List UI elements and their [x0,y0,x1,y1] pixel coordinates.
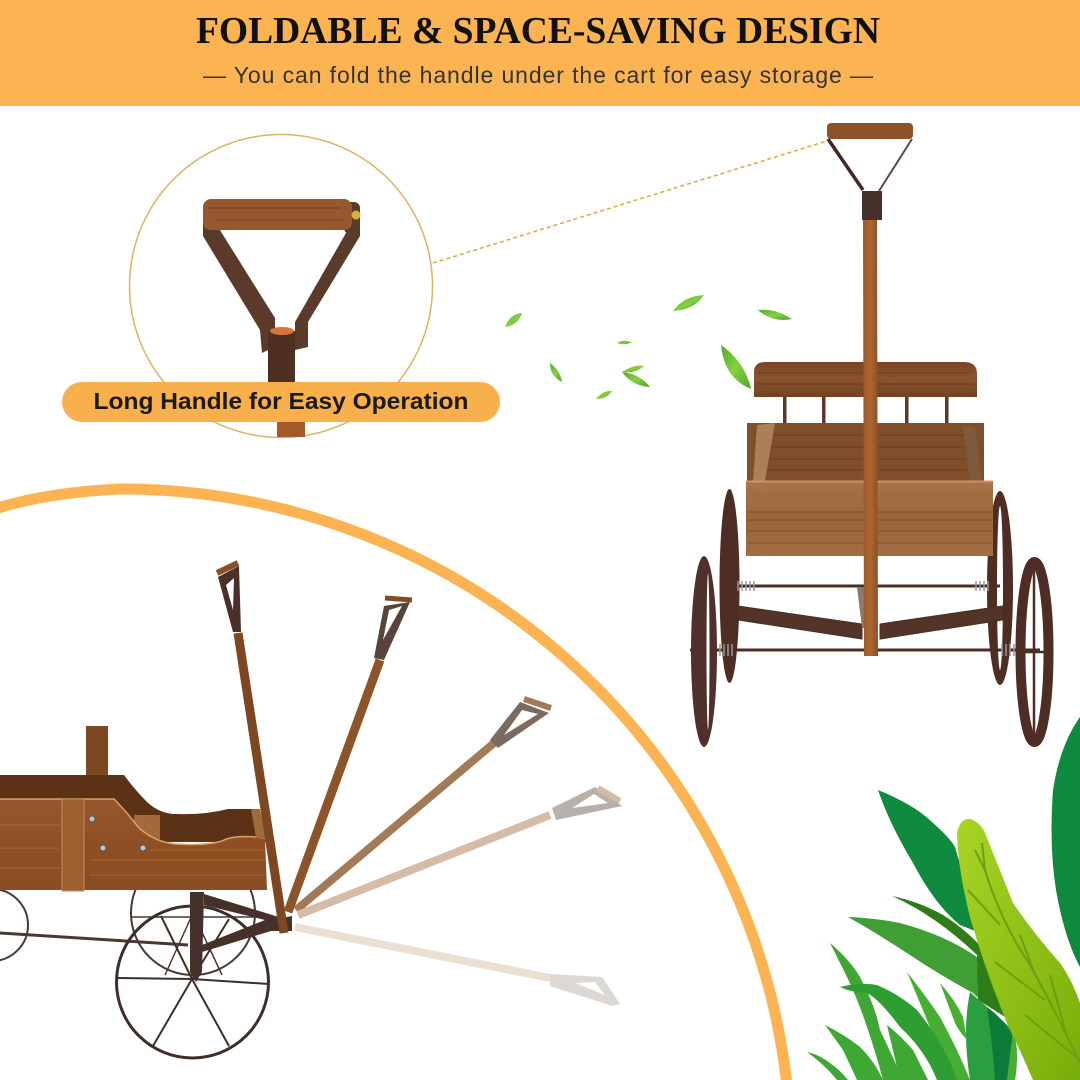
position 1 [217,563,284,933]
cart front panel [0,799,267,890]
bolts [89,816,146,851]
callout: long handle: Long Handle for Easy Operation [94,388,468,414]
dotted leader line [433,141,827,263]
floating leaves [505,295,792,399]
rear wheel [0,851,255,975]
position 3 [296,699,551,910]
large orange arc [0,489,787,1080]
handle close-up [203,199,360,437]
title: FOLDABLE & SPACE-SAVING DESIGN [196,10,880,52]
position 2 [288,598,412,912]
strip board [62,799,84,891]
seat back [783,396,948,423]
front wheel [116,906,269,1058]
rear wheels [720,489,1013,685]
detail circle: handle close-up [130,134,432,438]
cart box [747,423,984,483]
decorative plants [807,717,1080,1080]
position 4 [298,787,622,915]
handle fold positions [217,563,622,1006]
axle frame [690,581,1040,656]
header banner [0,0,1080,106]
bracket [190,892,204,982]
cart front view [690,123,1048,747]
cart interior [0,775,267,842]
callout: long handle [62,382,500,422]
subtitle: — You can fold the handle under the cart for easy storage — [203,62,873,88]
position 5 [295,927,620,1006]
side view cart [0,726,292,1058]
front wheels [691,556,1048,747]
handle [863,219,878,656]
seat side board [86,726,108,776]
